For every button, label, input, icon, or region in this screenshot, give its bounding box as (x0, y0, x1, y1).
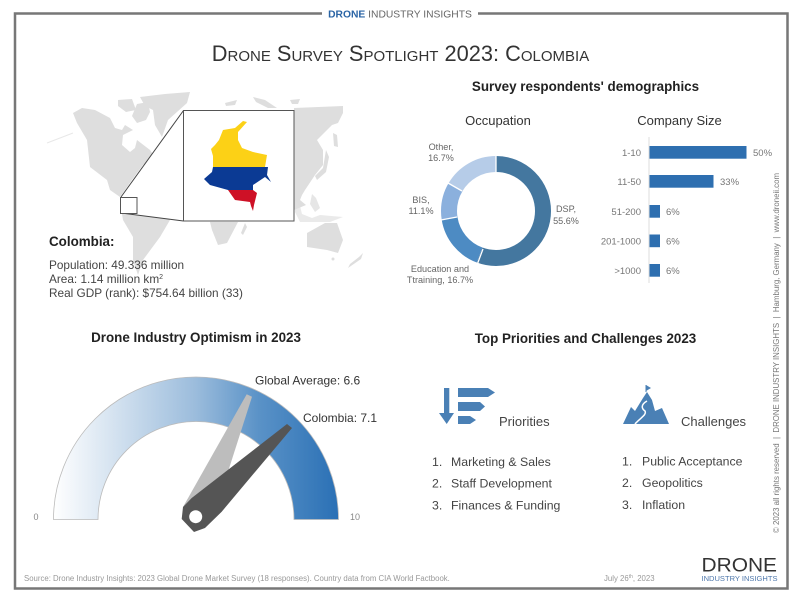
needle: Colombia (182, 424, 292, 532)
company size bar chart: 51-200 (611, 207, 641, 218)
date (604, 574, 655, 583)
company size bar chart: 1-10 (622, 148, 641, 159)
challenges list: 3. (622, 498, 632, 512)
occupation donut chart: BIS, (412, 195, 430, 205)
challenges list: Inflation (642, 498, 685, 512)
occupation donut chart: Other, (429, 142, 453, 152)
occupation donut chart: DSP, (556, 204, 576, 214)
source note: Source: Drone Industry Insights: 2023 Global Drone Market Survey (18 responses). Country data from CIA World Factbook. (24, 574, 450, 583)
challenges list: 1. (622, 454, 632, 468)
priorities list (432, 414, 561, 512)
optimism gauge: 10 (350, 512, 360, 522)
country facts: Area: 1.14 million km (49, 272, 159, 286)
company size bar chart: 6% (666, 266, 680, 277)
world map (47, 92, 363, 275)
occupation donut chart: 55.6% (553, 216, 579, 226)
icon: challenges (623, 385, 669, 424)
occupation donut chart: Ttraining, 16.7% (407, 275, 473, 285)
date: July 26 (604, 574, 629, 583)
company size bar chart: 11-50 (617, 177, 641, 188)
logo: DRONE (702, 554, 777, 576)
optimism gauge: Global Average: 6.6 (255, 374, 361, 388)
challenges list: Geopolitics (642, 476, 703, 490)
occupation donut chart: 11.1% (408, 206, 434, 216)
priorities list: Marketing & Sales (451, 455, 551, 469)
optimism gauge (33, 374, 377, 532)
title: Drone Survey Spotlight 2023: Colombia (212, 41, 589, 66)
priorities list: 2. (432, 476, 442, 490)
country facts: Colombia: (49, 234, 114, 249)
date: , 2023 (633, 574, 655, 583)
occupation donut chart (407, 113, 579, 285)
company size bar chart (601, 113, 773, 283)
needle: global average (183, 394, 252, 510)
flag map: blue (204, 167, 271, 190)
optimism gauge: 0 (33, 512, 39, 522)
country facts: Population: 49.336 million (49, 258, 184, 272)
priorities list: 1. (432, 455, 442, 469)
company size bar chart: 50% (753, 148, 773, 159)
heading: demographics: Survey respondents' demographics (472, 79, 699, 94)
priorities list: Staff Development (451, 476, 553, 490)
challenges list: Challenges (681, 414, 747, 429)
challenges list (622, 414, 747, 512)
zoom inset: Colombia flag map (120, 110, 294, 221)
heading: priorities and challenges: Top Priorities and Challenges 2023 (475, 331, 696, 346)
optimism gauge: Colombia: 7.1 (303, 411, 377, 425)
flag map: red (228, 190, 257, 211)
flag map: yellow (211, 121, 267, 167)
vertical credit line: © 2023 all rights reserved | DRONE INDUSTRY INSIGHTS | Hamburg, Germany | www.droneii.com (772, 173, 781, 533)
occupation donut chart: Occupation (465, 113, 531, 128)
country facts: 2 (159, 274, 163, 281)
company size bar chart: Company Size (637, 113, 722, 128)
company size bar chart: 33% (720, 177, 740, 188)
logo: INDUSTRY INSIGHTS (702, 576, 778, 583)
company size bar chart: 6% (666, 236, 680, 248)
date: th (629, 574, 633, 580)
heading: optimism: Drone Industry Optimism in 2023 (91, 330, 301, 345)
priorities list: 3. (432, 498, 442, 512)
country facts (49, 234, 243, 300)
company size bar chart: 6% (666, 207, 680, 218)
priorities list: Priorities (499, 414, 550, 429)
header brand: DRONE INDUSTRY INSIGHTS (328, 10, 472, 20)
occupation donut chart: Education and (411, 264, 469, 274)
country facts: Real GDP (rank): $754.64 billion (33) (49, 286, 243, 300)
icon: priorities (439, 388, 495, 424)
challenges list: Public Acceptance (642, 454, 743, 468)
company size bar chart: 201-1000 (601, 236, 641, 248)
company size bar chart: >1000 (614, 266, 641, 277)
priorities list: Finances & Funding (451, 498, 561, 512)
occupation donut chart: 16.7% (428, 153, 454, 163)
challenges list: 2. (622, 476, 632, 490)
